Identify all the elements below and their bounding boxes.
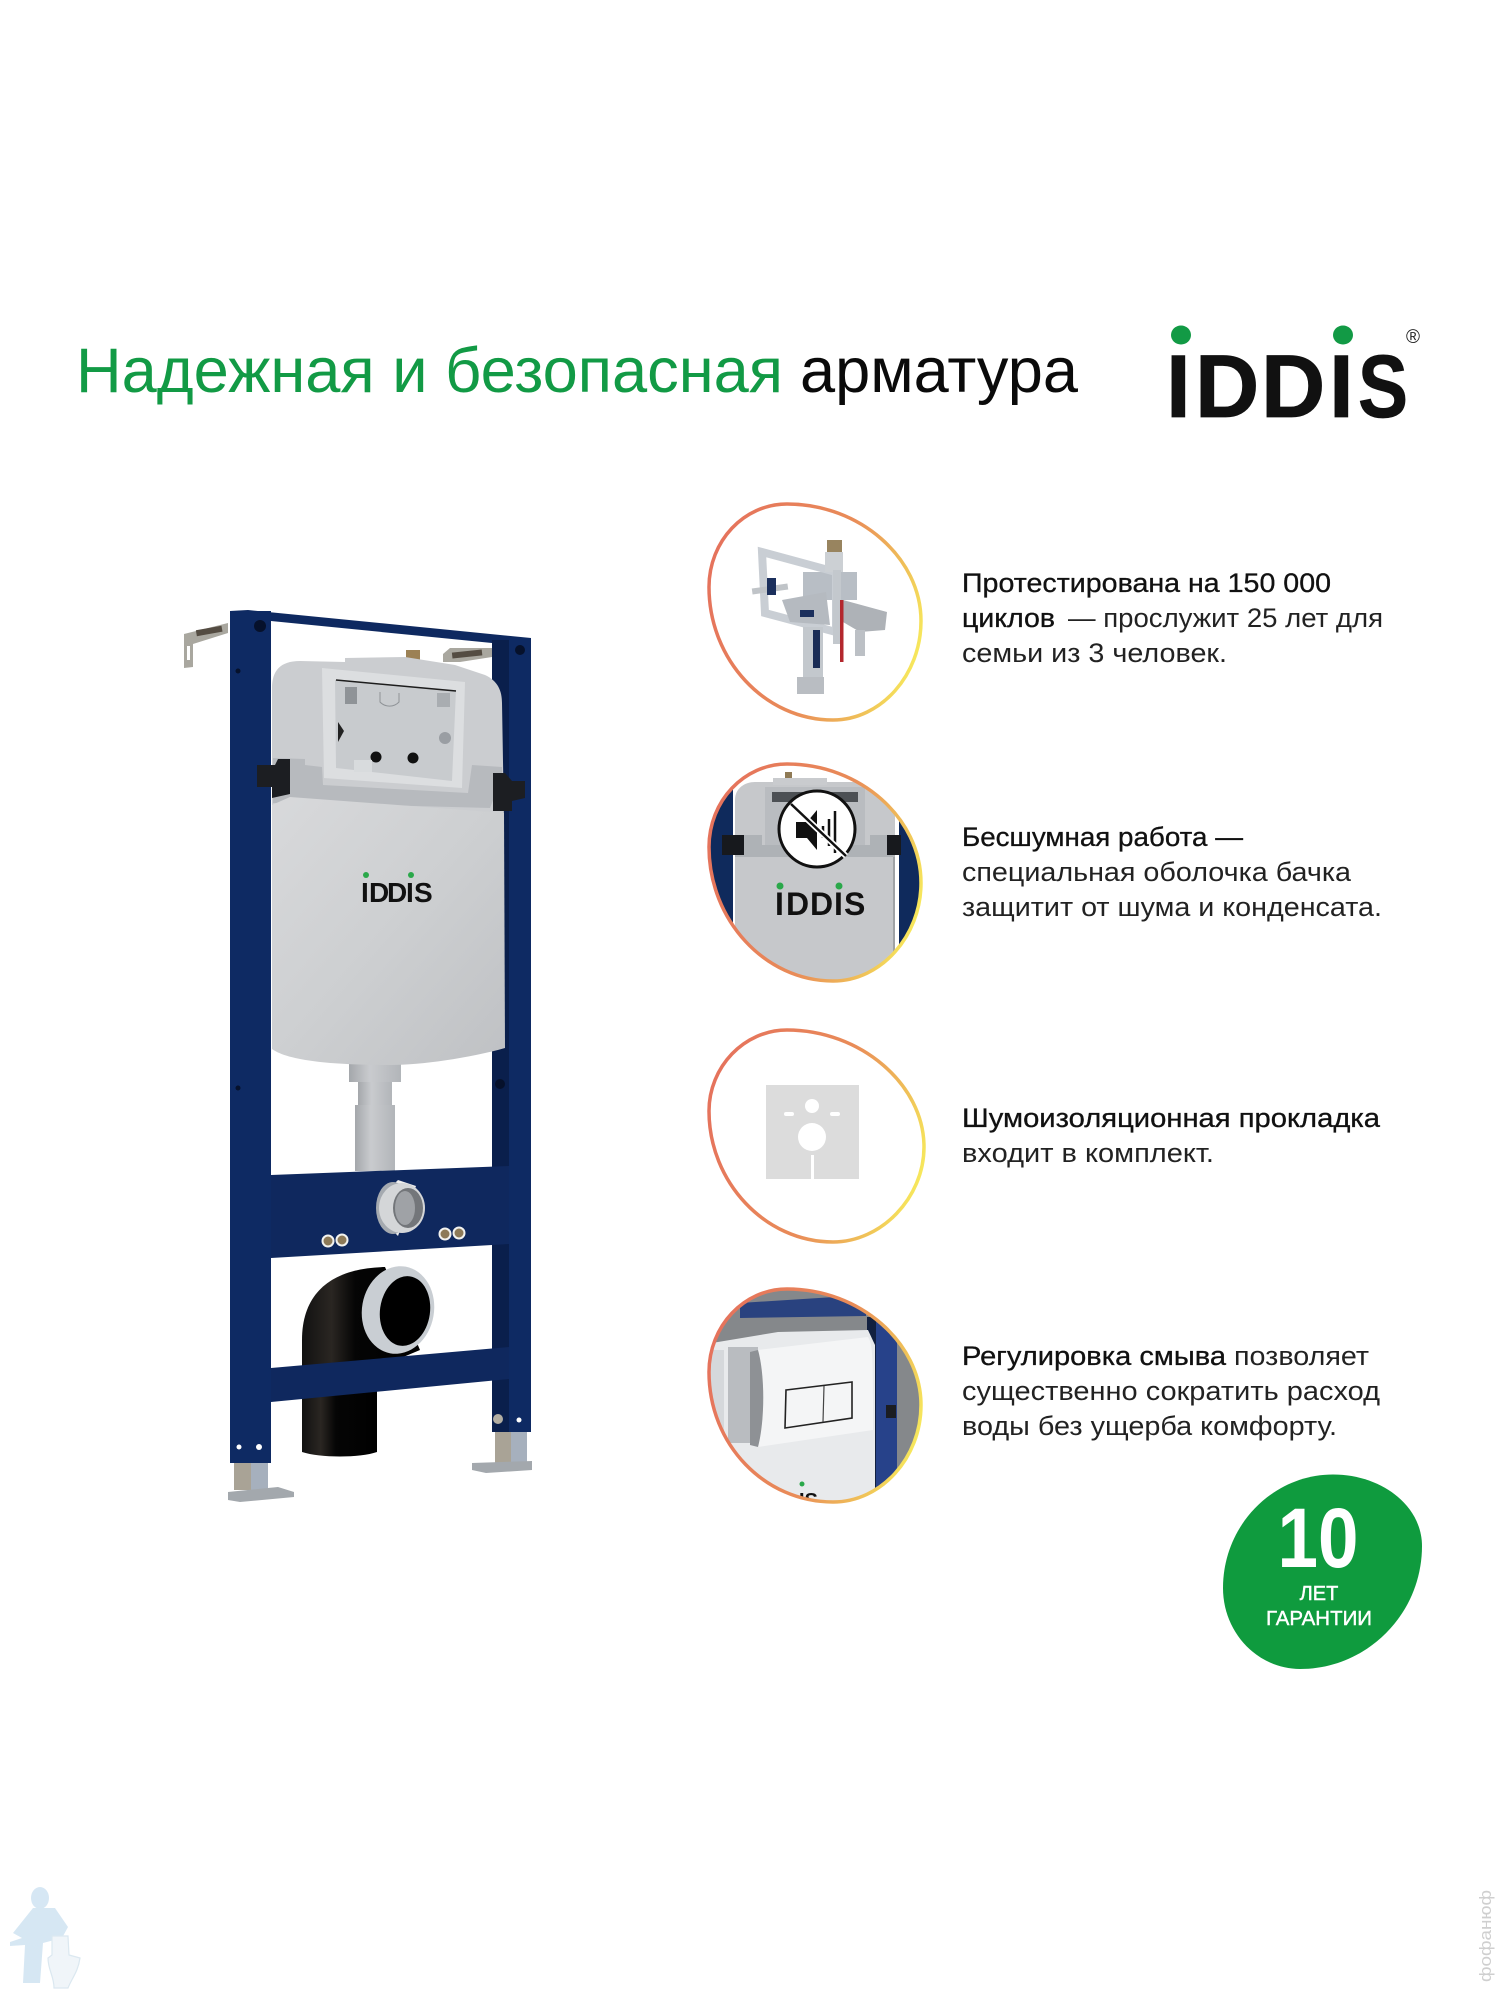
feature 4 text: воды без ущерба комфорту. [962, 1411, 1337, 1441]
steel feet [228, 1430, 532, 1502]
flush button outline [785, 1382, 852, 1428]
wall bracket left [184, 623, 228, 668]
feature 3 text: входит в комплект. [962, 1138, 1214, 1168]
ring [709, 504, 921, 720]
feature 1 text: семьи из 3 человек. [962, 638, 1227, 668]
feature 4 text [962, 1341, 1381, 1441]
flush mount plate [322, 668, 465, 788]
brand logo: IDDIS: S [1358, 336, 1408, 436]
icon: muted speaker [779, 791, 855, 867]
feature 2 text: специальная оболочка бачка [962, 857, 1351, 887]
upper cistern [272, 657, 504, 820]
feature 2 text: защитит от шума и конденсата. [962, 892, 1382, 922]
feature 3 text [962, 1103, 1380, 1168]
feature 2 text [962, 822, 1382, 922]
gasket [766, 1085, 859, 1179]
feature 3 image: sound insulation gasket [709, 1030, 924, 1242]
feature 3 text: Шумоизоляционная прокладка [962, 1103, 1380, 1133]
ring [709, 764, 921, 981]
feature 1 text: — прослужит 25 лет для [1068, 603, 1383, 633]
warranty badge: ЛЕТ [1300, 1583, 1338, 1605]
feature 2 image: silent operation [700, 760, 930, 990]
feature 1 text: Протестирована на 150 000 [962, 568, 1331, 598]
title: арматура [800, 336, 1079, 406]
feature 4 text: существенно сократить расход [962, 1376, 1381, 1406]
warranty badge [1223, 1474, 1422, 1669]
warranty badge: 10 [1278, 1491, 1358, 1585]
title: Надежная и безопасная [76, 336, 783, 406]
watermark: vertical site text: фофанюф [1476, 1890, 1495, 1982]
feature 4 image: flush adjustment: IS [799, 1490, 818, 1512]
brand logo: IDDIS: IDDI [1166, 336, 1354, 436]
watermark: plumber with toilet [10, 1887, 80, 1988]
black side clips [257, 759, 525, 811]
black drain elbow [302, 1260, 441, 1456]
ring [709, 1289, 921, 1502]
brass valve [406, 650, 420, 663]
logo on cistern close-up: IDDIS [775, 886, 865, 922]
grey flush pipe [349, 1060, 401, 1171]
feature 1 image: tested valve mechanism [709, 504, 921, 720]
brand logo: IDDIS [1166, 326, 1420, 436]
feature 4 text: Регулировка смыва [962, 1341, 1226, 1371]
feature 4 image: flush adjustment [707, 1287, 923, 1504]
wall bracket right [443, 648, 492, 662]
ring [709, 1030, 924, 1242]
cistern cover [272, 797, 505, 1065]
cistern logo: IDDIS [361, 877, 433, 908]
warranty badge: ГАРАНТИИ [1266, 1608, 1372, 1630]
feature 1 text: циклов [962, 603, 1055, 633]
valve drawing [752, 540, 887, 694]
product: installation frame with cistern [184, 610, 532, 1502]
navy frame [230, 610, 531, 1463]
brand logo: IDDIS: ® [1406, 327, 1420, 348]
water inlet connector [376, 1180, 425, 1236]
feature 2 text: Бесшумная работа — [962, 822, 1244, 852]
feature 4 text: позволяет [1234, 1341, 1369, 1371]
threaded studs [322, 1228, 464, 1246]
feature 1 text [962, 568, 1383, 668]
